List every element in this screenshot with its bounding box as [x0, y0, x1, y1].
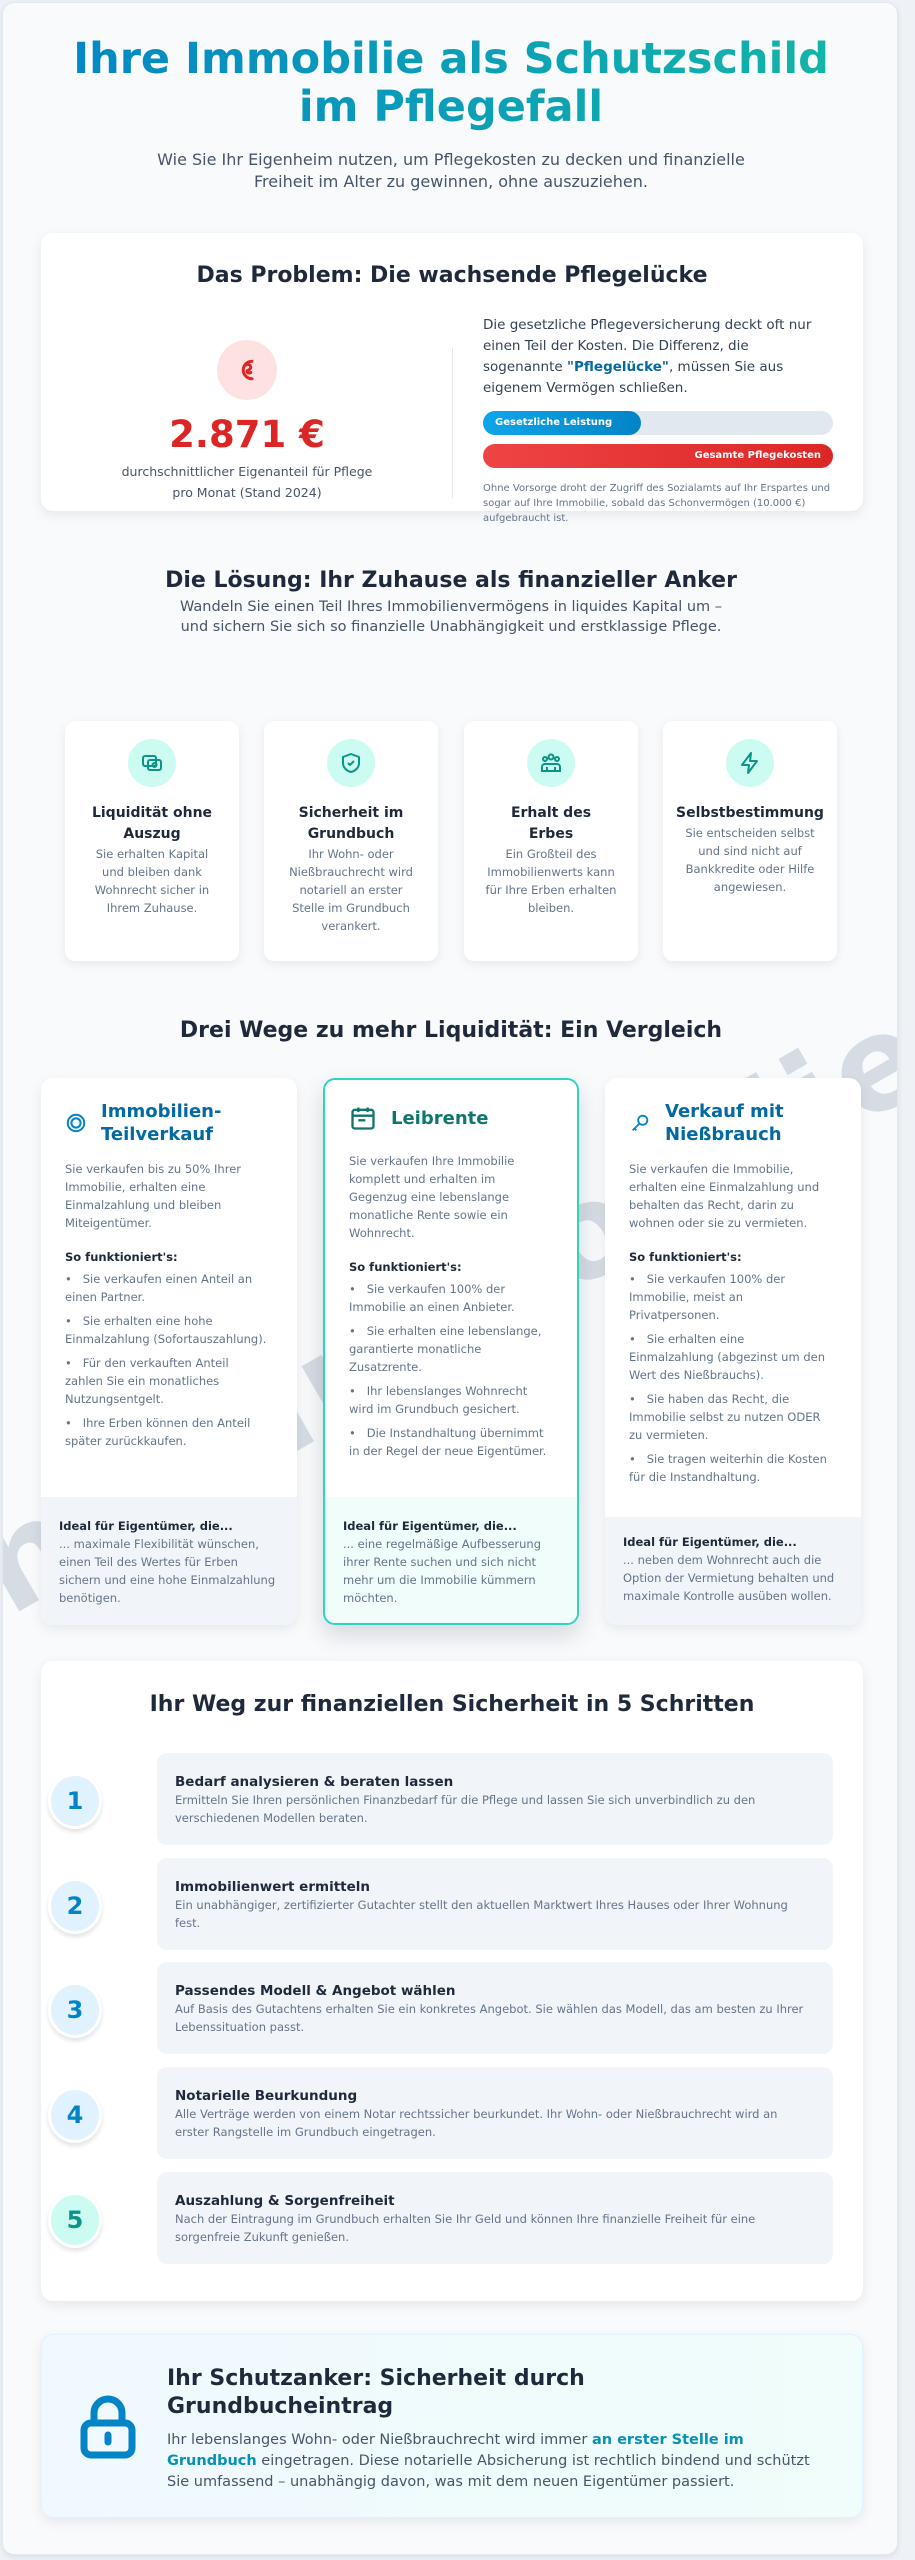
- feature: Erbe: Ein Großteil des Immobilienwerts kann für Ihre Erben erhalten bleiben.: [486, 847, 616, 915]
- feature: Liquidität: [65, 721, 239, 961]
- step 4: Notarielle Beurkundung: [175, 2088, 357, 2104]
- bar chart: Gesetzliche Leistung: [495, 417, 612, 428]
- solution subtitle: Wandeln Sie einen Teil Ihres Immobilienvermögens in liquides Kapital um –: [180, 599, 722, 615]
- feature: Liquidität: Sie erhalten Kapital und bleiben dank Wohnrecht sicher in Ihrem Zuhause.: [95, 847, 209, 915]
- footnote: Ohne Vorsorge droht der Zugriff des Sozialamts auf Ihr Erspartes und sogar auf Ihre Immobilie, sobald das Schonvermögen (10.000 €) aufgebraucht ist.: [483, 483, 830, 524]
- panel: problem: [41, 233, 863, 511]
- step 1: [47, 1753, 833, 1845]
- step 5: [47, 2172, 833, 2264]
- step 3: Passendes Modell & Angebot wählen: [175, 1983, 456, 1999]
- panel: Teilverkauf: • Sie verkaufen einen Anteil an einen Partner.: [65, 1272, 252, 1304]
- panel: Leibrente: [323, 1078, 579, 1625]
- panel: Teilverkauf: • Ihre Erben können den Anteil später zurückkaufen.: [65, 1416, 250, 1448]
- solution heading: Die Lösung: Ihr Zuhause als finanzieller Anker: [165, 568, 737, 593]
- title: Ihre Immobilie als Schutzschild: [73, 34, 829, 84]
- panel: Leibrente: • Sie verkaufen 100% der Immobilie an einen Anbieter.: [349, 1282, 515, 1314]
- step 5: Auszahlung & Sorgenfreiheit: [175, 2193, 395, 2209]
- panel: Nießbrauch: • Sie tragen weiterhin die Kosten für die Instandhaltung.: [629, 1452, 827, 1484]
- panel: Nießbrauch: So funktioniert's:: [629, 1250, 742, 1264]
- callout heading: Ihr Schutzanker: Sicherheit durch: [167, 2366, 585, 2391]
- callout text: Ihr lebenslanges Wohn- oder Nießbrauchrecht wird immer an erster Stelle im Grundbuch eingetragen. Diese notarielle Absicherung ist rechtlich bindend und schützt Sie umfassend – unabhängig davon, was mit dem neuen Eigentümer passiert.: [167, 2432, 810, 2490]
- feature: Sicherheit: [264, 721, 438, 961]
- step 1: Bedarf analysieren & beraten lassen: [175, 1774, 453, 1790]
- heading Teilverkauf: Teilverkauf: [101, 1124, 213, 1145]
- panel: Teilverkauf: Sie verkaufen bis zu 50% Ihrer Immobilie, erhalten eine Einmalzahlung und bleiben Miteigentümer.: [65, 1162, 241, 1230]
- panel: Leibrente: • Die Instandhaltung übernimmt in der Regel der neue Eigentümer.: [349, 1426, 546, 1458]
- comparison heading: Drei Wege zu mehr Liquidität: Ein Vergleich: [180, 1018, 722, 1043]
- feature: Selbstbestimmung: [663, 721, 837, 961]
- feature: Erbe: [464, 721, 638, 961]
- heading Teilverkauf: Immobilien-: [101, 1101, 221, 1122]
- panel: Nießbrauch: [605, 1078, 861, 1625]
- feature: Erbe: Erhalt des: [511, 805, 591, 821]
- feature: Selbstbestimmung: Sie entscheiden selbst und sind nicht auf Bankkredite oder Hilfe angewiesen.: [685, 826, 815, 894]
- step 4: [47, 2067, 833, 2159]
- panel: Leibrente: ... eine regelmäßige Aufbesserung ihrer Rente suchen und sich nicht mehr um die Immobilie kümmern möchten.: [343, 1537, 541, 1605]
- panel: Nießbrauch: • Sie haben das Recht, die Immobilie selbst zu nutzen ODER zu vermieten.: [629, 1392, 820, 1442]
- panel: Teilverkauf: ... maximale Flexibilität wünschen, einen Teil des Wertes für Erben sichern und eine hohe Einmalzahlung benötigen.: [59, 1537, 275, 1605]
- step 3: [47, 1962, 833, 2054]
- step 1: 1: [67, 1787, 83, 1815]
- problem heading: Das Problem: Die wachsende Pflegelücke: [196, 263, 708, 288]
- step 4: 4: [67, 2101, 83, 2129]
- panel: Nießbrauch: • Sie verkaufen 100% der Immobilie, meist an Privatpersonen.: [629, 1272, 785, 1322]
- feature: Erbe: Erbes: [529, 826, 573, 842]
- step 1: Ermitteln Sie Ihren persönlichen Finanzbedarf für die Pflege und lassen Sie sich unverbindlich zu den verschiedenen Modellen beraten.: [175, 1793, 755, 1825]
- panel: Nießbrauch: ... neben dem Wohnrecht auch die Option der Vermietung behalten und maximale Kontrolle ausüben wollen.: [623, 1553, 834, 1603]
- heading Nießbrauch: [632, 1101, 784, 1145]
- feature: Liquidität: Liquidität ohne: [92, 805, 212, 821]
- title: im Pflegefall: [299, 82, 603, 132]
- problem text: Die gesetzliche Pflegeversicherung deckt oft nur einen Teil der Kosten. Die Differenz, die sogenannte "Pflegelücke", müssen Sie aus eigenem Vermögen schließen.: [483, 317, 811, 396]
- panel: Leibrente: • Ihr lebenslanges Wohnrecht wird im Grundbuch gesichert.: [349, 1384, 527, 1416]
- heading Nießbrauch: Nießbrauch: [665, 1124, 782, 1145]
- panel: Leibrente: Ideal für Eigentümer, die...: [343, 1519, 517, 1533]
- panel: Leibrente: • Sie erhalten eine lebenslange, garantierte monatliche Zusatzrente.: [349, 1324, 541, 1374]
- panel: Teilverkauf: • Sie erhalten eine hohe Einmalzahlung (Sofortauszahlung).: [65, 1314, 266, 1346]
- panel: Leibrente: Sie verkaufen Ihre Immobilie komplett und erhalten im Gegenzug eine lebenslange monatliche Rente sowie ein Wohnrecht.: [349, 1154, 514, 1240]
- subtitle: Freiheit im Alter zu gewinnen, ohne auszuziehen.: [254, 172, 648, 191]
- panel: Teilverkauf: Ideal für Eigentümer, die...: [59, 1519, 233, 1533]
- step 3: 3: [67, 1996, 83, 2024]
- subtitle: Wie Sie Ihr Eigenheim nutzen, um Pflegekosten zu decken und finanzielle: [157, 150, 745, 169]
- step 3: Auf Basis des Gutachtens erhalten Sie ein konkretes Angebot. Sie wählen das Modell, das am besten zu Ihrer Lebenssituation passt.: [175, 2002, 803, 2034]
- step 4: Alle Verträge werden von einem Notar rechtssicher beurkundet. Ihr Wohn- oder Nießbrauchrecht wird an erster Rangstelle im Grundbuch eingetragen.: [175, 2107, 777, 2139]
- title: [3, 35, 899, 131]
- heading Nießbrauch: Verkauf mit: [665, 1101, 784, 1122]
- panel: Schutzanker callout: [41, 2334, 863, 2518]
- steps heading: Ihr Weg zur finanziellen Sicherheit in 5 Schritten: [150, 1692, 754, 1717]
- feature: Selbstbestimmung: Selbstbestimmung: [676, 805, 824, 821]
- step 5: 5: [67, 2206, 83, 2234]
- feature: Sicherheit: Grundbuch: [308, 826, 394, 842]
- panel: Nießbrauch: Ideal für Eigentümer, die...: [623, 1535, 797, 1549]
- icon: euro: [217, 340, 277, 400]
- solution subtitle: und sichern Sie sich so finanzielle Unabhängigkeit und erstklassige Pflege.: [181, 619, 721, 635]
- panel: Nießbrauch: Sie verkaufen die Immobilie, erhalten eine Einmalzahlung und behalten das Recht, darin zu wohnen oder sie zu vermieten.: [629, 1162, 819, 1230]
- panel: Nießbrauch: • Sie erhalten eine Einmalzahlung (abgezinst um den Wert des Nießbrauchs).: [629, 1332, 825, 1382]
- heading Teilverkauf: [66, 1101, 221, 1145]
- stat: monthly cost: 2.871 €: [169, 413, 325, 456]
- callout heading: [167, 2366, 585, 2419]
- panel: Leibrente: So funktioniert's:: [349, 1260, 462, 1274]
- feature: Sicherheit: Sicherheit im: [299, 805, 403, 821]
- panel: steps: [41, 1661, 863, 2301]
- step 2: [47, 1858, 833, 1950]
- icon: lock: [80, 2396, 136, 2458]
- solution subtitle: [180, 599, 722, 635]
- step 2: Ein unabhängiger, zertifizierter Gutachter stellt den aktuellen Marktwert Ihres Hauses oder Ihrer Wohnung fest.: [175, 1898, 788, 1930]
- panel: Teilverkauf: So funktioniert's:: [65, 1250, 178, 1264]
- subtitle: [157, 150, 745, 191]
- callout heading: Grundbucheintrag: [167, 2394, 393, 2419]
- stat: monthly cost: pro Monat (Stand 2024): [172, 485, 322, 500]
- stat: monthly cost: durchschnittlicher Eigenanteil für Pflege: [122, 464, 372, 479]
- heading Leibrente: [351, 1108, 488, 1130]
- step 5: Nach der Eintragung im Grundbuch erhalten Sie Ihr Geld und können Ihre finanzielle Freiheit für eine sorgenfreie Zukunft genießen.: [175, 2212, 755, 2244]
- stat: monthly cost: [122, 413, 372, 500]
- bar chart: Gesamte Pflegekosten: [694, 450, 821, 461]
- feature: Sicherheit: Ihr Wohn- oder Nießbrauchrecht wird notariell an erster Stelle im Grundbuch verankert.: [289, 847, 413, 933]
- panel: Teilverkauf: • Für den verkauften Anteil zahlen Sie ein monatliches Nutzungsentgelt.: [65, 1356, 229, 1406]
- step 2: 2: [67, 1892, 83, 1920]
- step 2: Immobilienwert ermitteln: [175, 1879, 370, 1895]
- feature: Liquidität: Auszug: [123, 826, 181, 842]
- heading Leibrente: Leibrente: [391, 1108, 488, 1128]
- bar chart: [483, 411, 833, 468]
- panel: Teilverkauf: [41, 1078, 297, 1625]
